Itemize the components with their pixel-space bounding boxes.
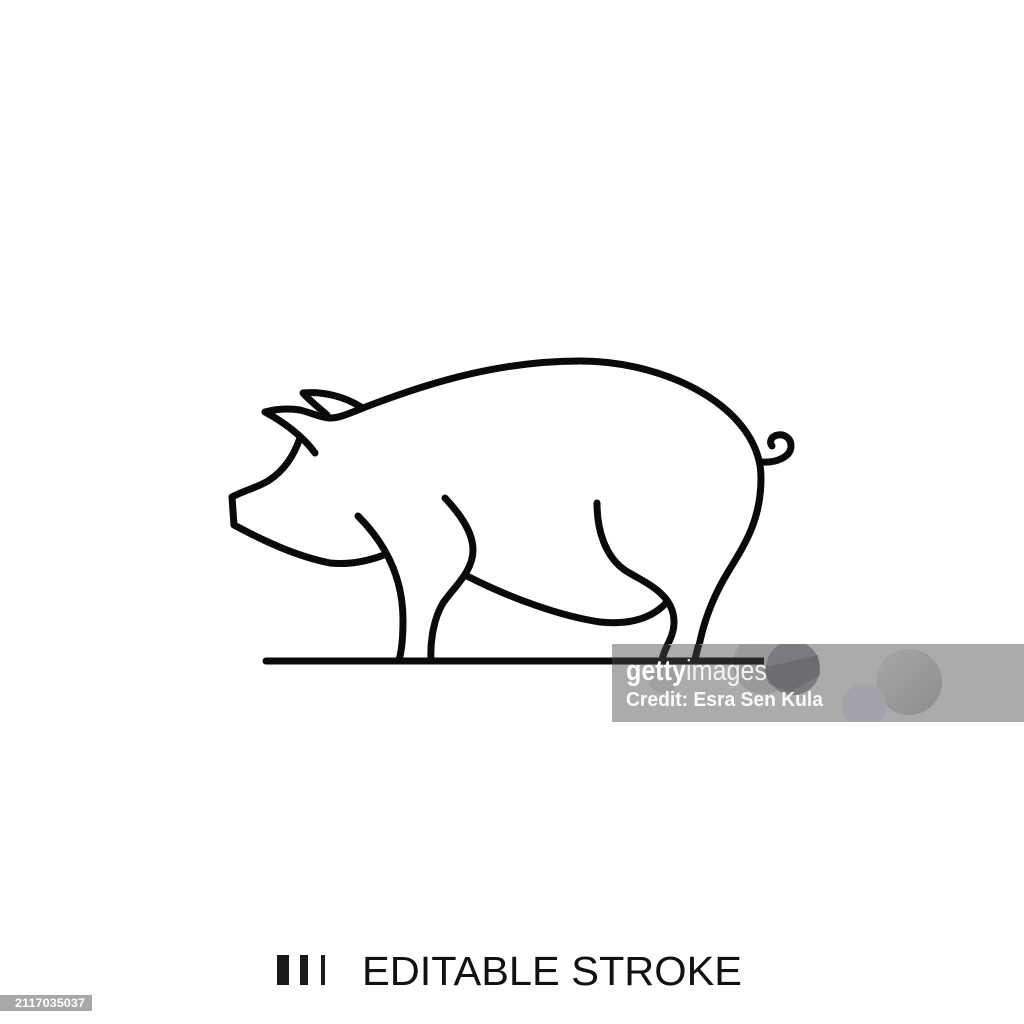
watermark background [612, 644, 1024, 722]
pig front leg [358, 516, 403, 660]
watermark circles [648, 644, 942, 722]
watermark: getty images credit [612, 644, 1024, 722]
pig rear leg [597, 503, 674, 646]
image id number: 2117035037 [15, 996, 85, 1010]
credit text: Credit: Esra Sen Kula [626, 689, 824, 711]
pig face and snout [232, 438, 384, 564]
ground line [266, 658, 612, 664]
getty images logo text: gettyimages [626, 655, 767, 687]
pig belly [467, 576, 666, 623]
editable stroke label: EDITABLE STROKE [362, 948, 742, 994]
pig body outline: rump, back and near ear [265, 361, 761, 646]
image id tag [0, 995, 92, 1011]
pig tail [762, 435, 791, 462]
pig ear inner line [265, 412, 315, 453]
icon: stroke weight bars [277, 955, 325, 985]
pig far ear [303, 393, 361, 415]
icon: pig line drawing [232, 361, 791, 661]
image id background [0, 995, 92, 1011]
pig second front leg [431, 498, 473, 660]
ground line and legs seen through watermark [612, 644, 764, 661]
infographic canvas [0, 358, 1024, 1011]
